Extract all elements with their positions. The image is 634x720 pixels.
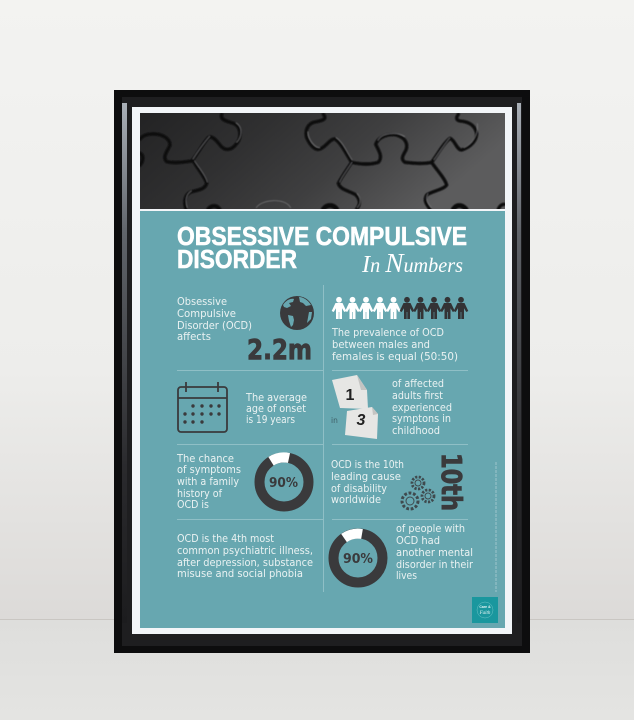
picture frame <box>114 90 530 653</box>
text: family history: OCD is <box>177 500 209 511</box>
text: affected adults: adults first <box>392 391 443 402</box>
text: prevalence: females is equal (50:50) <box>332 352 458 363</box>
text: prevalence: The prevalence of OCD <box>331 328 444 339</box>
icon: paper with 3: 3 <box>357 412 366 429</box>
subtitle: In Numbers: In Numbers <box>361 248 463 278</box>
stat: 10th leading cause <box>331 453 468 511</box>
logo: Faith <box>479 611 491 616</box>
text: other disorder: of people with <box>396 524 465 535</box>
icon: paper with 1: 1 <box>346 387 355 404</box>
stat: 2.2m affected <box>177 296 314 366</box>
text: other disorder <box>396 524 474 582</box>
text: family history: The chance <box>176 454 234 465</box>
logo: Care & <box>479 605 491 609</box>
text: family history: of symptoms <box>177 465 241 476</box>
text: family history <box>176 454 241 511</box>
text: affected adults: symptons in <box>392 414 451 425</box>
stat: 4th most common: OCD is the 4th most <box>177 534 274 545</box>
vertical source credit <box>495 462 497 592</box>
text: leading cause: leading cause <box>331 472 401 483</box>
icon: gears <box>402 477 434 509</box>
photo: puzzle pieces <box>140 113 505 209</box>
stat: 4th most common: common psychiatric illness, <box>177 546 313 557</box>
stat: 4th most common: misuse and social phobia <box>177 569 303 580</box>
text: prevalence <box>331 328 458 363</box>
text: family history: with a family <box>177 477 239 488</box>
stat: 4th most common: after depression, substance <box>177 558 313 569</box>
number: 2.2m: 2.2m <box>247 333 312 366</box>
text: affected adults: experienced <box>392 403 452 414</box>
icon: globe <box>280 296 314 330</box>
donut chart: 90%: 90% <box>269 476 298 491</box>
text: age of onset: The average <box>245 393 307 404</box>
icon: calendar <box>178 382 227 432</box>
text: OCD affects: affects <box>177 332 211 343</box>
stat: another mental disorder 90% <box>334 524 474 582</box>
text: leading cause: worldwide <box>331 495 381 506</box>
donut chart: 90% <box>334 534 382 582</box>
title: DISORDER <box>177 246 297 274</box>
text: affected adults: childhood <box>392 426 440 437</box>
text: leading cause <box>331 460 404 506</box>
text: age of onset: age of onset <box>246 404 306 415</box>
text: other disorder: lives <box>396 571 417 582</box>
text: leading cause: of disability <box>331 484 387 495</box>
text: other disorder: another mental <box>396 548 473 559</box>
title: OBSESSIVE COMPULSIVE <box>177 223 467 251</box>
text: prevalence: between males and <box>332 340 430 351</box>
logo <box>472 597 498 623</box>
text: leading cause: OCD is the 10th <box>331 460 404 471</box>
teal poster panel <box>140 211 505 628</box>
text: OCD affects: Disorder (OCD) <box>177 321 252 332</box>
floor <box>0 619 634 720</box>
text: age of onset: is 19 years <box>246 415 295 426</box>
text: other disorder: disorder in their <box>396 560 474 571</box>
text: OCD affects <box>177 297 252 343</box>
donut chart: 90%: 90% <box>343 552 373 567</box>
icon: ten people <box>332 297 468 319</box>
stat: family history 90% <box>176 454 308 511</box>
stat: 4th most common <box>177 534 313 580</box>
dividers <box>177 285 468 592</box>
stat: 1 in 3 <box>331 375 452 439</box>
label: in: in <box>331 416 338 425</box>
stat: average age of onset <box>178 382 307 432</box>
number: 10th: 10th <box>435 453 468 511</box>
text: affected adults: of affected <box>392 379 444 390</box>
text: age of onset <box>245 393 307 426</box>
text: family history: history of <box>177 489 222 500</box>
text: OCD affects: Compulsive <box>177 309 236 320</box>
title <box>177 223 467 274</box>
text: affected adults <box>392 379 452 437</box>
stat: prevalence 50:50 <box>331 297 468 363</box>
text: other disorder: OCD had <box>396 536 440 547</box>
text: OCD affects: Obsessive <box>177 297 227 308</box>
